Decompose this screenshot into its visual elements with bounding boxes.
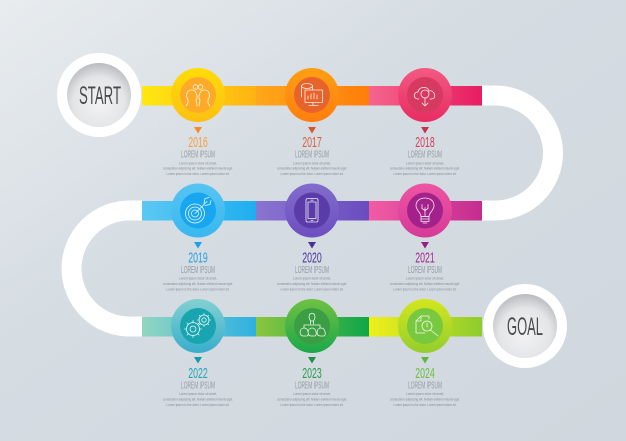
step 2018: Lorem ipsum dolor sit amet, <box>406 161 444 165</box>
goal badge: GOAL <box>507 313 543 341</box>
step 2023 <box>256 299 369 407</box>
step 2023: consectetur adipiscing elit. Nullam eleifend mauris eget. <box>277 398 347 402</box>
step 2016 <box>142 68 256 176</box>
step 2021: consectetur adipiscing elit. Nullam eleifend mauris eget. <box>390 282 460 286</box>
step 2018: LOREM IPSUM <box>408 150 442 160</box>
step 2022 <box>142 299 256 407</box>
step 2024: 2024 <box>415 366 435 382</box>
step 2022: LOREM IPSUM <box>181 380 215 392</box>
icon: smartphone <box>306 198 318 222</box>
step 2018: Lorem ipsum is the dolor. Lorem ipsum dolor sit. <box>394 172 456 176</box>
icon: team hierarchy <box>300 313 325 336</box>
step 2020: Lorem ipsum is the dolor. Lorem ipsum dolor sit. <box>280 288 344 292</box>
icon: monitor and database <box>302 84 322 106</box>
step 2023: Lorem ipsum dolor sit amet, <box>293 392 331 396</box>
step 2021 <box>369 184 482 292</box>
step 2016: 2016 <box>188 135 208 151</box>
step 2020 <box>256 184 369 292</box>
step 2024: Lorem ipsum dolor sit amet, <box>406 392 444 396</box>
step 2023: 2023 <box>302 366 322 382</box>
step 2022: Lorem ipsum dolor sit amet, <box>179 392 217 396</box>
start badge: START <box>79 82 121 110</box>
step 2020: LOREM IPSUM <box>295 265 329 276</box>
step 2016: LOREM IPSUM <box>181 150 215 160</box>
step 2019: consectetur adipiscing elit. Nullam eleifend mauris eget. <box>163 282 233 286</box>
icon: gears <box>184 314 210 338</box>
step 2017: Lorem ipsum dolor sit amet, <box>293 161 331 165</box>
step 2022: 2022 <box>188 366 208 382</box>
step 2020: Lorem ipsum dolor sit amet, <box>293 276 331 280</box>
step 2019 <box>142 184 256 292</box>
step 2017: Lorem ipsum is the dolor. Lorem ipsum dolor sit. <box>280 172 344 176</box>
step 2017 <box>256 68 369 176</box>
white road: right curve <box>482 96 553 210</box>
step 2022: Lorem ipsum is the dolor. Lorem ipsum dolor sit. <box>166 403 230 407</box>
step 2024: consectetur adipiscing elit. Nullam eleifend mauris eget. <box>390 398 460 402</box>
step 2017: consectetur adipiscing elit. Nullam eleifend mauris eget. <box>277 167 347 171</box>
step 2016: Lorem ipsum dolor sit amet, <box>179 161 217 165</box>
step 2019: LOREM IPSUM <box>181 265 215 276</box>
icon: cloud download <box>414 87 435 106</box>
icon: document and magnifier <box>416 316 438 336</box>
step 2018: consectetur adipiscing elit. Nullam eleifend mauris eget. <box>390 167 460 171</box>
step 2022: consectetur adipiscing elit. Nullam eleifend mauris eget. <box>163 398 233 402</box>
icon: light bulb <box>416 198 434 223</box>
step 2016: consectetur adipiscing elit. Nullam eleifend mauris eget. <box>163 167 233 171</box>
step 2021: Lorem ipsum is the dolor. Lorem ipsum dolor sit. <box>394 288 456 292</box>
white road: left curve <box>72 210 142 326</box>
step 2023: LOREM IPSUM <box>295 380 329 392</box>
step 2020: consectetur adipiscing elit. Nullam eleifend mauris eget. <box>277 282 347 286</box>
step 2023: Lorem ipsum is the dolor. Lorem ipsum dolor sit. <box>280 403 344 407</box>
step 2024: Lorem ipsum is the dolor. Lorem ipsum dolor sit. <box>394 403 456 407</box>
step 2024 <box>369 299 482 407</box>
step 2021: LOREM IPSUM <box>408 265 442 276</box>
step 2024: LOREM IPSUM <box>408 380 442 392</box>
start badge <box>57 53 141 137</box>
icon: two heads and link <box>186 85 210 106</box>
goal badge <box>483 284 567 368</box>
step 2016: Lorem ipsum is the dolor. Lorem ipsum dolor sit. <box>166 172 230 176</box>
step 2021: 2021 <box>415 250 435 266</box>
icon: target and arrow <box>186 198 211 223</box>
step 2019: 2019 <box>188 250 208 266</box>
step 2020: 2020 <box>302 250 322 266</box>
step 2017: LOREM IPSUM <box>295 150 329 160</box>
step 2017: 2017 <box>302 135 322 151</box>
step 2021: Lorem ipsum dolor sit amet, <box>406 276 444 280</box>
step 2018 <box>369 68 482 176</box>
step 2019: Lorem ipsum is the dolor. Lorem ipsum dolor sit. <box>166 288 230 292</box>
step 2019: Lorem ipsum dolor sit amet, <box>179 276 217 280</box>
step 2018: 2018 <box>415 135 435 151</box>
